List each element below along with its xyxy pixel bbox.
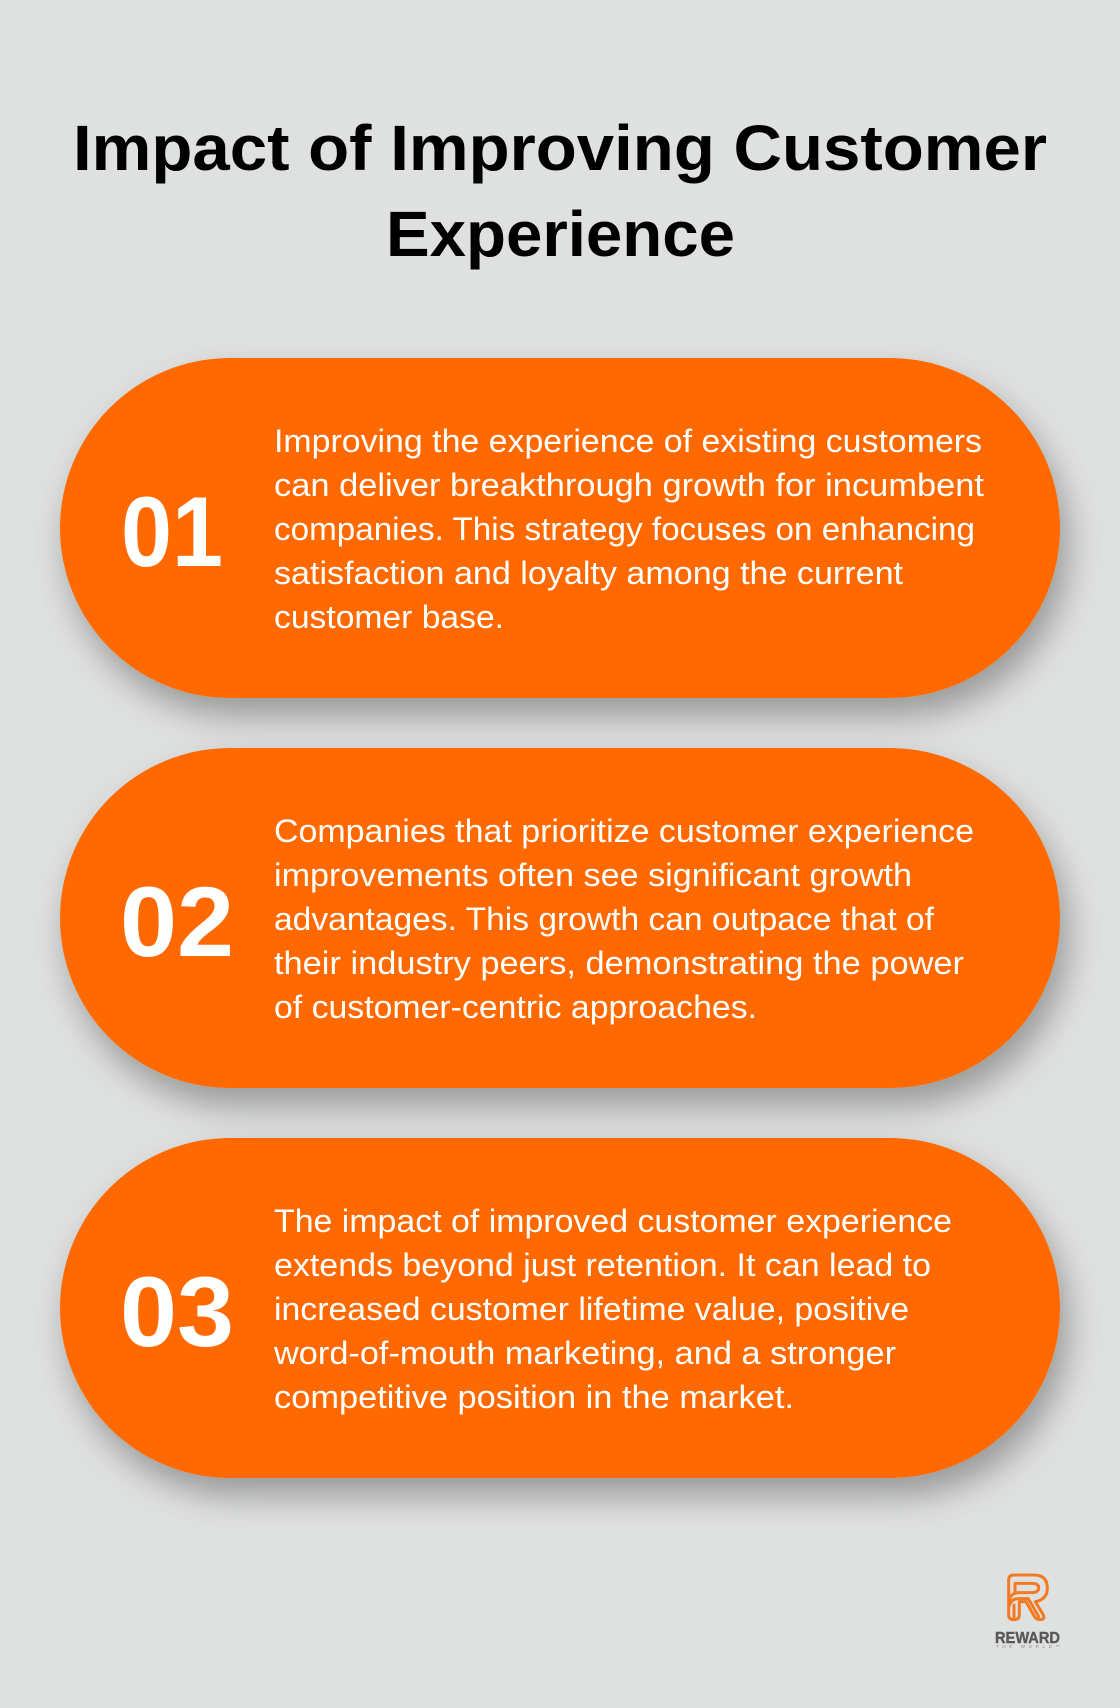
text block: step 01: satisfaction and loyalty among the current: [274, 555, 903, 591]
text block: step 03: competitive position in the market.: [274, 1379, 794, 1415]
wordmark: REWARD: [995, 1630, 1060, 1647]
title: [73, 112, 1047, 270]
logo: Reward the World: [995, 1575, 1060, 1649]
text block: step 03: increased customer lifetime value, positive: [274, 1291, 909, 1327]
text block: step 01: [274, 423, 984, 635]
number 02: 02: [120, 866, 234, 977]
number 03: 03: [120, 1256, 234, 1367]
text block: step 02: [274, 813, 974, 1025]
panel: step 02: [60, 748, 1060, 1088]
text block: step 02: their industry peers, demonstrating the power: [274, 945, 964, 981]
text block: step 01: companies. This strategy focuses on enhancing: [274, 511, 975, 547]
text block: step 02: Companies that prioritize customer experience: [274, 813, 974, 849]
text block: step 02: advantages. This growth can outpace that of: [274, 901, 934, 937]
text block: step 01: can deliver breakthrough growth for incumbent: [274, 467, 984, 503]
text block: step 02: improvements often see significant growth: [274, 857, 912, 893]
text block: step 03: extends beyond just retention. It can lead to: [274, 1247, 931, 1283]
icon: R mark: [1009, 1575, 1047, 1620]
text block: step 02: of customer-centric approaches.: [274, 989, 757, 1025]
tagline: THE WORLD™: [996, 1644, 1060, 1649]
text block: step 01: Improving the experience of existing customers: [274, 423, 982, 459]
panel: step 01: [60, 358, 1060, 698]
text block: step 03: [273, 1203, 952, 1415]
text block: step 03: word-of-mouth marketing, and a stronger: [273, 1335, 896, 1371]
text block: step 01: customer base.: [274, 599, 504, 635]
panel: step 03: [60, 1138, 1060, 1478]
title: Experience: [386, 198, 735, 270]
title: Impact of Improving Customer: [73, 112, 1047, 184]
number 01: 01: [121, 476, 223, 587]
text block: step 03: The impact of improved customer experience: [274, 1203, 952, 1239]
